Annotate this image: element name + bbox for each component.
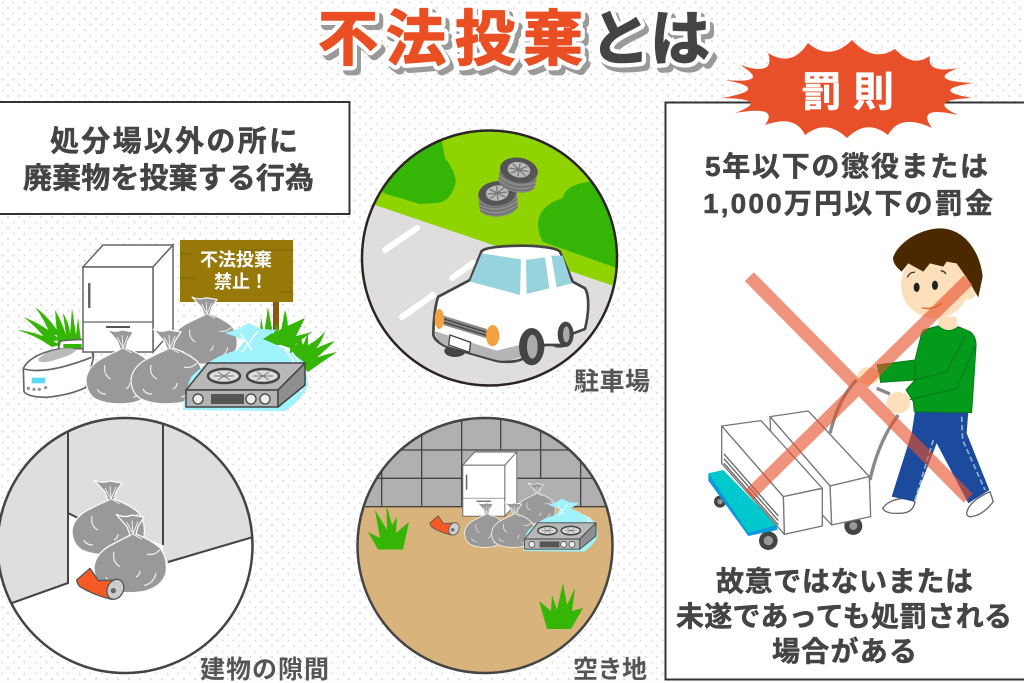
title xyxy=(318,6,710,73)
wall center xyxy=(68,410,163,545)
note text xyxy=(676,566,1012,667)
sign: no dumping: 禁止！ xyxy=(214,272,268,292)
penalty line 2: 1,000万円以下の罰金 xyxy=(703,188,993,219)
icon: grass right xyxy=(259,307,337,372)
illustration: person pushing cart crossed out xyxy=(708,228,993,550)
title outline xyxy=(318,6,710,73)
definition text line 2: 廃棄物を投棄する行為 xyxy=(23,162,314,195)
icon: refrigerator, bags and stove xyxy=(83,245,308,411)
icon: refrigerator, bags and stove xyxy=(463,452,598,552)
wall right xyxy=(163,426,251,564)
icon: can xyxy=(77,568,127,602)
grass area xyxy=(375,132,616,286)
note line 1: 故意ではないまたは xyxy=(716,566,973,597)
burst badge: penalties xyxy=(722,40,973,138)
panel: penalties xyxy=(666,102,1024,680)
penalty line 1: 5年以下の懲役または xyxy=(705,151,988,182)
icon: front garbage bag xyxy=(94,514,166,593)
icon: back garbage bag xyxy=(72,480,144,555)
wall left xyxy=(0,434,67,602)
person xyxy=(857,228,993,517)
bush right xyxy=(538,182,616,268)
icon: grass tuft right xyxy=(539,583,583,629)
sign: no dumping xyxy=(180,240,293,330)
note line 3: 場合がある xyxy=(772,635,917,667)
definition text line 1: 処分場以外の所に xyxy=(50,125,298,158)
icon: grass front blade xyxy=(263,318,312,348)
panel: definition xyxy=(0,102,350,214)
label: parking lot: 駐車場 xyxy=(574,368,650,396)
penalty text xyxy=(703,151,993,219)
burst badge: penalties: 罰則 xyxy=(801,69,894,115)
illustration: dumped waste with sign xyxy=(17,240,337,411)
box back xyxy=(770,411,871,525)
icon: grass tuft left xyxy=(368,505,409,550)
box front xyxy=(722,421,822,534)
icon: car xyxy=(433,246,588,365)
road dashes xyxy=(385,228,473,317)
bush left xyxy=(382,141,456,204)
cart handles xyxy=(830,380,898,480)
icon: grass left xyxy=(17,307,82,347)
title: とは: とは xyxy=(590,6,710,73)
icon: tires xyxy=(477,155,540,219)
block wall xyxy=(364,419,606,508)
circle: gap between buildings xyxy=(0,410,260,674)
circle: parking lot xyxy=(355,120,630,386)
title: 不法投棄: 不法投棄 xyxy=(318,6,583,73)
circle: vacant lot xyxy=(350,410,630,674)
sign: no dumping: 不法投棄 xyxy=(200,250,272,270)
icon: rice cooker xyxy=(23,339,93,397)
title outline: とは xyxy=(590,6,710,73)
red cross mark xyxy=(749,277,968,498)
icon: can xyxy=(430,516,461,537)
cart base and wheels xyxy=(708,470,862,550)
note line 2: 未遂であっても処罰される xyxy=(676,601,1012,632)
title outline: 不法投棄 xyxy=(318,6,583,73)
